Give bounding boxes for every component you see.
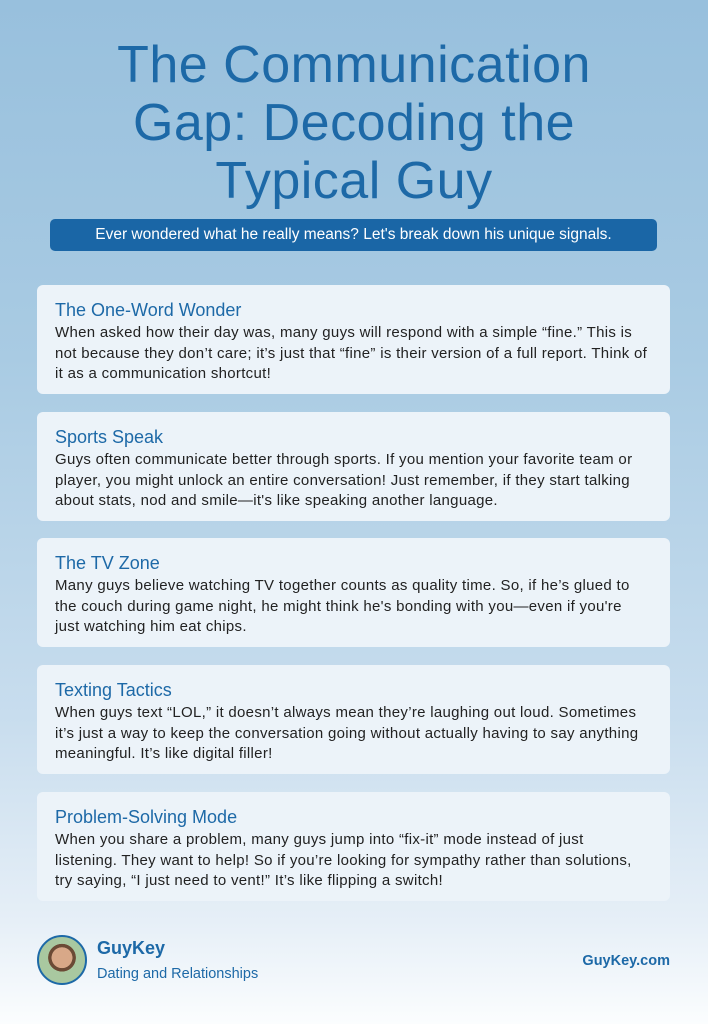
panel: problem-solving mode: try saying, “I just need to vent!” It’s like flipping a switch! bbox=[55, 872, 443, 889]
panel: problem-solving mode: When you share a problem, many guys jump into “fix-it” mode instead of just bbox=[55, 831, 584, 848]
panel: texting tactics: meaningful. It’s like digital filler! bbox=[55, 745, 273, 762]
panel: tv zone: Many guys believe watching TV together counts as quality time. So, if he’s glued to bbox=[55, 577, 630, 594]
panel: one-word wonder: not because they don’t care; it’s just that “fine” is their version of a full report. Think of bbox=[55, 344, 647, 362]
title bbox=[117, 36, 591, 210]
panel: sports speak: player, you might unlock an entire conversation! Just remember, if they start talking bbox=[55, 472, 630, 488]
panel: sports speak bbox=[37, 412, 670, 521]
brand name: GuyKey bbox=[97, 938, 165, 958]
panel: one-word wonder: The One-Word Wonder bbox=[55, 300, 241, 320]
panel: sports speak: Guys often communicate better through sports. If you mention your favorite team or bbox=[55, 451, 632, 468]
brand tagline: Dating and Relationships bbox=[97, 966, 258, 982]
icon: avatar bbox=[37, 935, 87, 985]
panel: sports speak: about stats, nod and smile—it's like speaking another language. bbox=[55, 492, 498, 509]
panel: tv zone: The TV Zone bbox=[55, 553, 160, 573]
panel: tv zone: the couch during game night, he might think he's bonding with you—even if you're bbox=[55, 598, 622, 614]
panel: problem-solving mode: listening. They want to help! So if you’re looking for sympathy rather than solutions, bbox=[55, 852, 632, 868]
panel: texting tactics: When guys text “LOL,” it doesn’t always mean they’re laughing out loud. Sometimes bbox=[55, 704, 636, 721]
title: Typical Guy bbox=[215, 152, 493, 210]
panel: texting tactics: it’s just a way to keep the conversation going without actually having to say anything bbox=[55, 724, 638, 742]
panel: problem-solving mode bbox=[37, 792, 670, 901]
panel: problem-solving mode: Problem-Solving Mode bbox=[55, 807, 237, 827]
panel: tv zone bbox=[37, 538, 670, 647]
panel: tv zone: just watching him eat chips. bbox=[55, 618, 247, 635]
panel: one-word wonder bbox=[37, 285, 670, 394]
title: Gap: Decoding the bbox=[133, 94, 575, 152]
panel: one-word wonder: it as a communication shortcut! bbox=[55, 365, 271, 382]
panel: one-word wonder: When asked how their day was, many guys will respond with a simple “fine.” This is bbox=[55, 324, 632, 341]
website: GuyKey.com bbox=[582, 953, 670, 969]
subtitle pill: Ever wondered what he really means? Let's break down his unique signals. bbox=[95, 226, 612, 243]
panel: texting tactics: Texting Tactics bbox=[55, 680, 172, 700]
panel: sports speak: Sports Speak bbox=[55, 427, 163, 447]
subtitle pill bbox=[50, 219, 657, 251]
panel: texting tactics bbox=[37, 665, 670, 774]
title: The Communication bbox=[117, 36, 591, 94]
